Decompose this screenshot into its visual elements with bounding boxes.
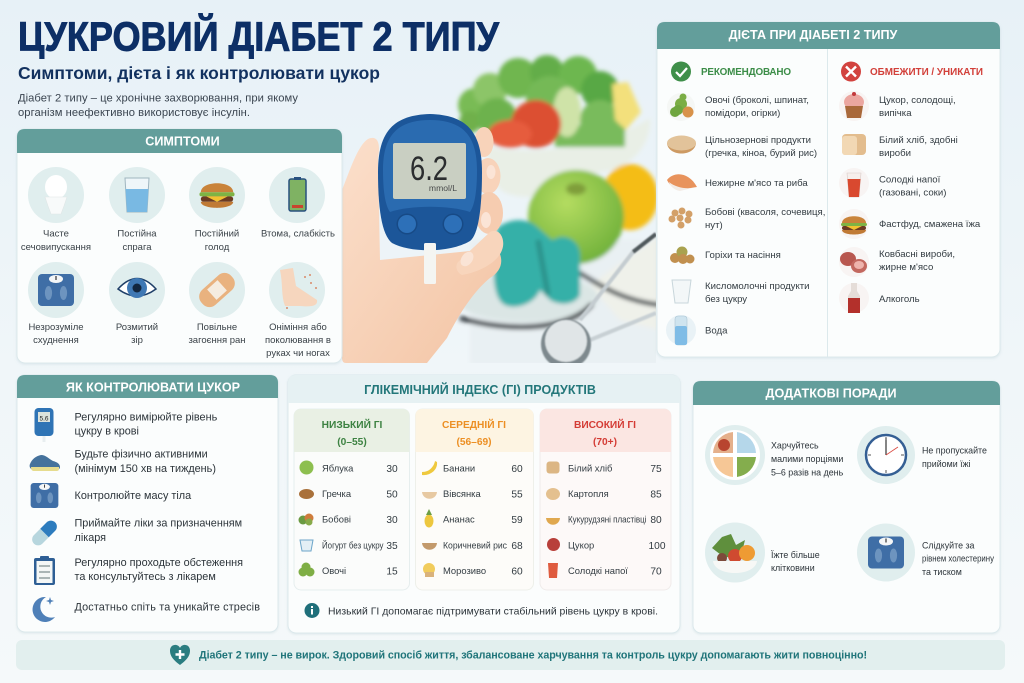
icon: info <box>304 603 320 618</box>
icon: pineapple <box>424 509 434 528</box>
row: sugar: 100 <box>648 541 666 552</box>
row: beans: Бобові <box>322 514 351 524</box>
text: do not skip meals: Не пропускайте <box>922 446 987 456</box>
text: weight: Контролюйте масу тіла <box>74 490 192 502</box>
photo: glucose meter <box>378 114 482 284</box>
icon: clipboard <box>34 556 55 585</box>
symptoms header <box>17 129 342 153</box>
label: numbness: поколювання в <box>265 335 331 346</box>
row: oatmeal <box>443 488 523 500</box>
row: corn flakes: 80 <box>650 515 662 526</box>
medium GI title: СЕРЕДНІЙ ГІ <box>442 418 506 431</box>
row: brown rice: Коричневий рис <box>443 540 507 550</box>
text: cholesterol: Слідкуйте за <box>922 540 975 550</box>
icon: sausage <box>839 247 869 277</box>
row: ice cream: Морозиво <box>443 565 486 576</box>
icon: scale <box>31 483 58 508</box>
label: numbness: руках чи ногах <box>266 348 330 359</box>
text: do not skip meals: прийоми їжі <box>922 459 971 469</box>
icon: banana <box>422 461 437 475</box>
icon: foot <box>269 262 325 318</box>
row: apples: 30 <box>386 464 398 475</box>
icon: fast food <box>839 209 869 239</box>
label: hunger <box>195 228 239 253</box>
icon: toilet <box>28 167 84 223</box>
icon: weight scale <box>28 262 84 318</box>
label: hunger: голод <box>205 242 230 253</box>
photo: stethoscope <box>541 234 656 369</box>
label: blurred vision <box>116 322 158 346</box>
label: weight loss: Незрозуміле <box>28 322 84 333</box>
GI header <box>288 375 680 403</box>
icon: eye <box>109 262 165 318</box>
high GI title <box>574 418 636 448</box>
icon: vegetables <box>298 562 314 576</box>
icon: scale <box>857 524 915 582</box>
text: water: Вода <box>705 326 728 336</box>
text: sausage: Ковбасні вироби, <box>879 249 955 260</box>
row: sugar: Цукор <box>568 540 594 550</box>
text: activity <box>74 449 216 475</box>
label: blurred vision: Розмитий <box>116 322 158 333</box>
GI note: Низький ГІ допомагає підтримувати стабільний рівень цукру в крові. <box>328 606 658 618</box>
text: sweet drinks: (газовані, соки) <box>879 188 946 198</box>
text: beans <box>705 207 825 231</box>
panel: glycemic index <box>288 375 680 633</box>
low GI title: НИЗЬКИЙ ГІ <box>322 418 383 431</box>
footer banner <box>16 640 1005 670</box>
text: whole grains <box>705 135 817 159</box>
row: vegetables <box>322 565 398 577</box>
column: low GI <box>294 409 410 590</box>
text: vegetables: помідори, огірки) <box>705 108 780 119</box>
text: checkups <box>74 557 243 583</box>
low GI title <box>322 418 383 448</box>
row: white bread: 75 <box>650 464 662 475</box>
text: small portions: Харчуйтесь <box>771 440 819 450</box>
text: more fiber <box>771 550 820 573</box>
row: white bread: Білий хліб <box>568 462 612 474</box>
row: bananas: 60 <box>511 464 523 475</box>
row: yogurt: Йогурт без цукру <box>322 540 384 550</box>
row: yogurt: 35 <box>386 541 398 552</box>
label: hunger: Постійний <box>195 228 239 240</box>
label: slow healing <box>188 322 246 346</box>
icon: meter <box>34 408 54 442</box>
intro text: Діабет 2 типу – це хронічне захворювання, при якому <box>18 92 298 104</box>
icon: cupcake <box>839 91 869 121</box>
row: oatmeal: Вівсянка <box>443 488 481 499</box>
medium GI band <box>416 409 534 452</box>
icon: apple <box>300 460 314 474</box>
row: potato: Картопля <box>568 488 609 499</box>
text: dairy: без цукру <box>705 294 747 305</box>
icon: ice cream <box>423 563 435 577</box>
icon: yogurt <box>300 540 313 551</box>
row: potato: 85 <box>650 489 662 500</box>
text: checkups: Регулярно проходьте обстеження <box>74 557 243 569</box>
icon: moon <box>33 597 55 622</box>
text: white bread <box>879 135 958 159</box>
row: potato <box>568 488 662 500</box>
photo: glucose meter: mmol/L <box>429 183 457 193</box>
icon: bread <box>546 462 560 474</box>
icon: plate <box>705 425 765 485</box>
label: frequent urination: сечовипускання <box>21 242 91 253</box>
icon: sweet drink <box>839 168 869 198</box>
text: whole grains: Цільнозернові продукти <box>705 135 811 146</box>
icon: alcohol <box>839 283 869 313</box>
icon: low battery <box>269 167 325 223</box>
text: small portions: малими порціями <box>771 454 843 464</box>
text: sweets <box>879 95 956 119</box>
icon: bandage <box>189 262 245 318</box>
text: medicine <box>74 518 242 544</box>
text: white bread: Білий хліб, здобні <box>879 135 958 146</box>
panel: diet <box>657 22 1000 357</box>
text: cholesterol: рівнем холестерину <box>922 554 994 564</box>
text: do not skip meals <box>922 446 987 469</box>
row: vegetables: 15 <box>386 566 398 577</box>
row: apples: Яблука <box>322 462 354 474</box>
icon: meter: 5.6 <box>39 416 49 422</box>
medium GI title: (56–69) <box>456 437 492 448</box>
row: white bread <box>568 462 662 475</box>
icon: beans <box>668 208 692 228</box>
recommended heading: РЕКОМЕНДОВАНО <box>701 67 791 78</box>
text: more fiber: Їжте більше <box>771 550 820 560</box>
limit heading: ОБМЕЖИТИ / УНИКАТИ <box>870 67 983 78</box>
symptoms heading: СИМПТОМИ <box>145 134 220 148</box>
text: sweets: Цукор, солодощі, <box>879 95 956 106</box>
label: numbness <box>265 322 331 359</box>
hero photo: meter, hand and healthy food <box>342 55 660 369</box>
icon: drink <box>548 563 558 578</box>
label: fatigue: Втома, слабкість <box>261 228 335 240</box>
row: sugar <box>568 540 666 552</box>
text: medicine: лікаря <box>74 532 106 544</box>
text: small portions: 5–6 разів на день <box>771 468 844 478</box>
row: vegetables: Овочі <box>322 565 346 576</box>
label: blurred vision: зір <box>131 335 143 346</box>
row: pineapple: 59 <box>511 515 523 526</box>
row: oatmeal: 55 <box>511 489 523 500</box>
icon: burger <box>189 167 245 223</box>
text: checkups: та консультуйтесь з лікарем <box>74 571 216 583</box>
text: activity: (мінімум 150 хв на тиждень) <box>74 463 216 475</box>
text: beans: нут) <box>705 220 723 231</box>
tips header <box>693 381 1000 405</box>
row: pineapple <box>443 514 523 526</box>
row: beans <box>322 514 398 526</box>
row: sweet drinks: Солодкі напої <box>568 565 628 576</box>
icon: brown rice <box>422 543 437 550</box>
text: measure: цукру в крові <box>74 425 139 437</box>
row: sweet drinks <box>568 565 662 577</box>
row: bananas: Банани <box>443 462 475 474</box>
icon: vegetables <box>667 93 695 121</box>
icon: salad bowl <box>705 522 765 582</box>
icon: sugar <box>547 538 560 551</box>
label: numbness: Оніміння або <box>269 322 327 333</box>
diet heading: ДІЄТА ПРИ ДІАБЕТІ 2 ТИПУ <box>729 28 898 42</box>
control header <box>17 375 278 398</box>
icon: check <box>671 62 691 82</box>
text: measure <box>74 411 218 437</box>
row: ice cream: 60 <box>511 566 523 577</box>
icon: potato <box>546 488 560 500</box>
icon: cross <box>841 62 861 82</box>
text: sweets: випічка <box>879 108 912 119</box>
icon: pill <box>30 518 59 548</box>
title: ЦУКРОВИЙ ДІАБЕТ 2 ТИПУ <box>18 14 499 60</box>
icon: nuts <box>670 246 694 264</box>
label: weight loss <box>28 322 84 346</box>
photo: blurred food background <box>454 52 656 334</box>
text: nuts: Горіхи та насіння <box>705 250 781 261</box>
icon: water <box>666 315 696 345</box>
text: activity: Будьте фізично активними <box>74 449 208 461</box>
GI heading: ГЛІКЕМІЧНИЙ ІНДЕКС (ГІ) ПРОДУКТІВ <box>364 382 596 397</box>
diet header <box>657 22 1000 49</box>
text: measure: Регулярно вимірюйте рівень <box>74 411 218 423</box>
row: sweet drinks: 70 <box>650 566 662 577</box>
row: bananas <box>443 462 523 475</box>
panel: symptoms <box>17 129 342 363</box>
text: alcohol: Алкоголь <box>879 294 920 305</box>
text: sausage: жирне м'ясо <box>879 262 933 273</box>
text: whole grains: (гречка, кіноа, бурий рис) <box>705 148 817 159</box>
label: slow healing: загоєння ран <box>188 335 246 346</box>
text: vegetables: Овочі (броколі, шпинат, <box>705 95 809 106</box>
label: thirst: Постійна <box>117 228 157 240</box>
text: beans: Бобові (квасоля, сочевиця, <box>705 207 825 218</box>
icon: glass of water <box>109 167 165 223</box>
row: brown rice: 68 <box>511 541 523 552</box>
icon: dairy <box>672 280 691 303</box>
icon: oatmeal <box>422 492 437 499</box>
text: white bread: вироби <box>879 148 911 159</box>
intro text <box>18 92 298 119</box>
intro text: організм неефективно використовує інсулін. <box>18 107 250 119</box>
text: vegetables <box>705 95 809 119</box>
label: frequent urination <box>21 228 91 253</box>
row: corn flakes: Кукурудзяні пластівці <box>568 514 646 524</box>
icon: corn flakes <box>546 518 560 525</box>
low GI title: (0–55) <box>337 437 367 448</box>
label: frequent urination: Часте <box>43 228 69 240</box>
text: dairy <box>705 281 810 305</box>
label: thirst <box>117 228 157 253</box>
tips heading: ДОДАТКОВІ ПОРАДИ <box>765 386 897 400</box>
text: cholesterol: та тиском <box>922 567 962 577</box>
text: medicine: Приймайте ліки за призначенням <box>74 518 242 530</box>
photo: glucose meter: 6.2 <box>410 150 448 188</box>
text: sweet drinks: Солодкі напої <box>879 174 941 186</box>
panel: additional tips <box>693 381 1000 633</box>
medium GI title <box>442 418 506 448</box>
high GI band <box>540 409 671 452</box>
row: buckwheat <box>322 488 398 500</box>
text: meat and fish: Нежирне м'ясо та риба <box>705 178 808 189</box>
icon: beans <box>298 514 314 526</box>
icon: meat and fish <box>667 174 697 191</box>
label: weight loss: схуднення <box>33 335 79 346</box>
label: thirst: спрага <box>122 242 152 253</box>
text: small portions <box>771 440 844 478</box>
column: medium GI <box>416 409 534 590</box>
text: fast food: Фастфуд, смажена їжа <box>879 219 981 230</box>
text: sausage <box>879 249 955 273</box>
text: sleep: Достатньо спіть та уникайте стресів <box>74 601 260 613</box>
photo: hand <box>342 127 503 363</box>
icon: heart with cross <box>170 645 190 665</box>
subtitle: Симптоми, дієта і як контролювати цукор <box>18 63 380 83</box>
icon: buckwheat <box>299 489 314 499</box>
row: ice cream <box>443 565 523 577</box>
row: buckwheat: Гречка <box>322 488 352 499</box>
text: more fiber: клітковини <box>771 563 815 573</box>
column: high GI <box>540 409 671 590</box>
label: slow healing: Повільне <box>197 322 237 333</box>
control heading: ЯК КОНТРОЛЮВАТИ ЦУКОР <box>66 380 240 394</box>
panel: how to control sugar <box>17 375 278 632</box>
icon: whole grains <box>667 136 696 154</box>
high GI title: (70+) <box>593 437 617 448</box>
icon: sneaker <box>30 455 60 471</box>
row: buckwheat: 50 <box>386 489 398 500</box>
footer text: Діабет 2 типу – не вирок. Здоровий спосіб життя, збалансоване харчування та контроль цукру допомагають жити повноцінно! <box>199 650 867 662</box>
icon: white bread <box>842 134 866 155</box>
icon: clock <box>857 426 915 484</box>
row: apples <box>322 462 398 475</box>
text: cholesterol <box>922 540 994 577</box>
row: pineapple: Ананас <box>443 514 475 524</box>
high GI title: ВИСОКИЙ ГІ <box>574 418 636 431</box>
row: beans: 30 <box>386 515 398 526</box>
text: dairy: Кисломолочні продукти <box>705 281 810 292</box>
text: sweet drinks <box>879 174 946 198</box>
low GI band <box>294 409 410 452</box>
